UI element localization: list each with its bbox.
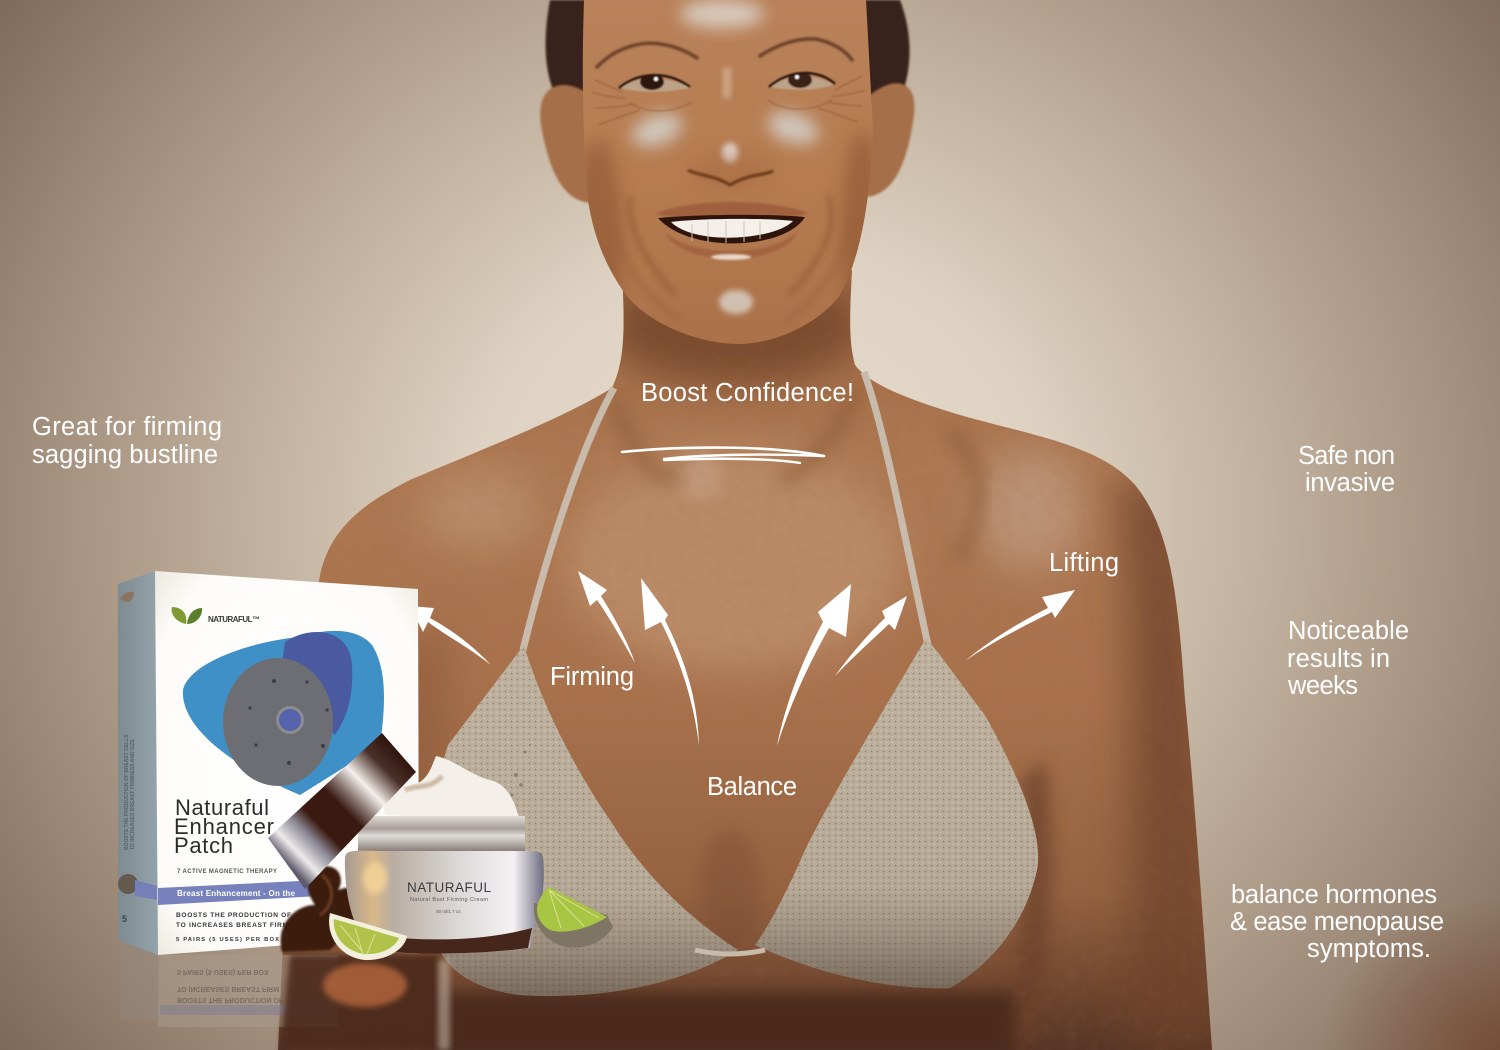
label: balance: Balance	[707, 773, 797, 801]
product box: enhancement patch	[118, 571, 419, 955]
jar label: 50 ml/1.7 oz.	[436, 909, 462, 914]
text: noticeable results: results in	[1287, 645, 1390, 673]
jar label	[407, 880, 491, 914]
lime wedge right	[534, 887, 613, 948]
lime wedge left	[329, 913, 407, 960]
jar label: Natural Bust Firming Cream	[410, 897, 488, 903]
reflected box text: TO INCREASES BREAST FIRM	[177, 985, 279, 992]
hair	[546, 0, 910, 118]
product description: 5 PAIRS (5 USES) PER BOX	[176, 937, 279, 943]
arrow: behind product box	[410, 606, 491, 665]
cream swirl	[384, 756, 520, 820]
text: balance hormones: & ease menopause	[1230, 908, 1444, 936]
text: noticeable results: weeks	[1287, 672, 1358, 700]
text: firming claim	[32, 413, 222, 469]
nose	[688, 170, 773, 185]
face	[582, 0, 873, 344]
text: balance hormones	[1230, 881, 1444, 963]
arrow: lifting outer	[965, 590, 1075, 661]
box front	[155, 571, 419, 955]
label: lifting: Lifting	[1049, 549, 1119, 577]
text: firming claim: Great for firming	[32, 413, 222, 441]
left bikini cup	[430, 645, 738, 996]
smiling mouth	[655, 202, 808, 260]
product description	[176, 912, 291, 943]
jar body	[345, 851, 544, 954]
arrow: firming left	[578, 571, 635, 663]
dark botanical garnish	[281, 866, 371, 952]
box spine: 5	[122, 914, 127, 924]
box spine: BOOSTS THE PRODUCTION OF BREAST CELLS	[124, 734, 130, 850]
ears	[540, 83, 914, 203]
cream splash droplets	[510, 744, 531, 796]
product title: Enhancer	[174, 814, 274, 839]
text: boost confidence: Boost Confidence!	[641, 379, 854, 407]
brand leaves	[172, 607, 202, 624]
jar neck	[358, 816, 525, 852]
text: balance hormones: symptoms.	[1307, 935, 1431, 963]
box spine	[118, 571, 158, 955]
product subtitle: 7 ACTIVE MAGNETIC THERAPY	[177, 869, 277, 875]
cream jar	[345, 756, 544, 954]
text: balance hormones: balance hormones	[1231, 881, 1437, 909]
text: safe non invasive: Safe non	[1298, 442, 1395, 470]
halter straps	[523, 372, 928, 650]
text: firming claim: sagging bustline	[32, 441, 218, 469]
reflected box text: 5 PAIRS (5 USES) PER BOX	[177, 968, 269, 975]
purple banner: Breast Enhancement - On the	[177, 889, 296, 898]
arrow: centre left	[641, 578, 699, 746]
text: noticeable results	[1287, 617, 1409, 700]
reflected box text: BOOSTS THE PRODUCTION OF	[177, 996, 284, 1003]
text: noticeable results: Noticeable	[1288, 617, 1409, 645]
box spine: TO INCREASES BREAST FIRMNESS AND SIZE	[130, 738, 136, 850]
bikini centre tie	[695, 950, 765, 954]
product title	[174, 795, 274, 858]
purple banner	[158, 880, 320, 905]
product reflection on glass table	[120, 945, 450, 1050]
magnetic patch disc	[223, 658, 333, 786]
indigo blob	[280, 632, 352, 735]
tilted jar lid	[268, 733, 416, 889]
product title: Naturaful	[175, 795, 269, 820]
reflected box text	[177, 968, 284, 1003]
product description: TO INCREASES BREAST FIRM	[176, 922, 288, 929]
eyebrows	[597, 39, 852, 67]
photo: woman in knitted bikini	[270, 0, 1240, 1050]
product title: Patch	[174, 833, 233, 858]
arrow: lifting inner	[835, 596, 907, 676]
brand name: NATURAFUL™	[208, 615, 260, 624]
right bikini cup	[755, 638, 1038, 988]
arrow: centre right	[777, 584, 851, 746]
eyes	[619, 72, 835, 92]
label: firming: Firming	[550, 663, 634, 691]
blue blob graphic	[183, 631, 384, 795]
text: safe non invasive	[1298, 442, 1395, 497]
underline scribble	[622, 448, 824, 463]
jar label: NATURAFUL	[407, 880, 491, 895]
text: safe non invasive: invasive	[1305, 469, 1395, 497]
torso and shoulders	[270, 265, 1240, 1050]
product description: BOOSTS THE PRODUCTION OF	[176, 912, 291, 919]
